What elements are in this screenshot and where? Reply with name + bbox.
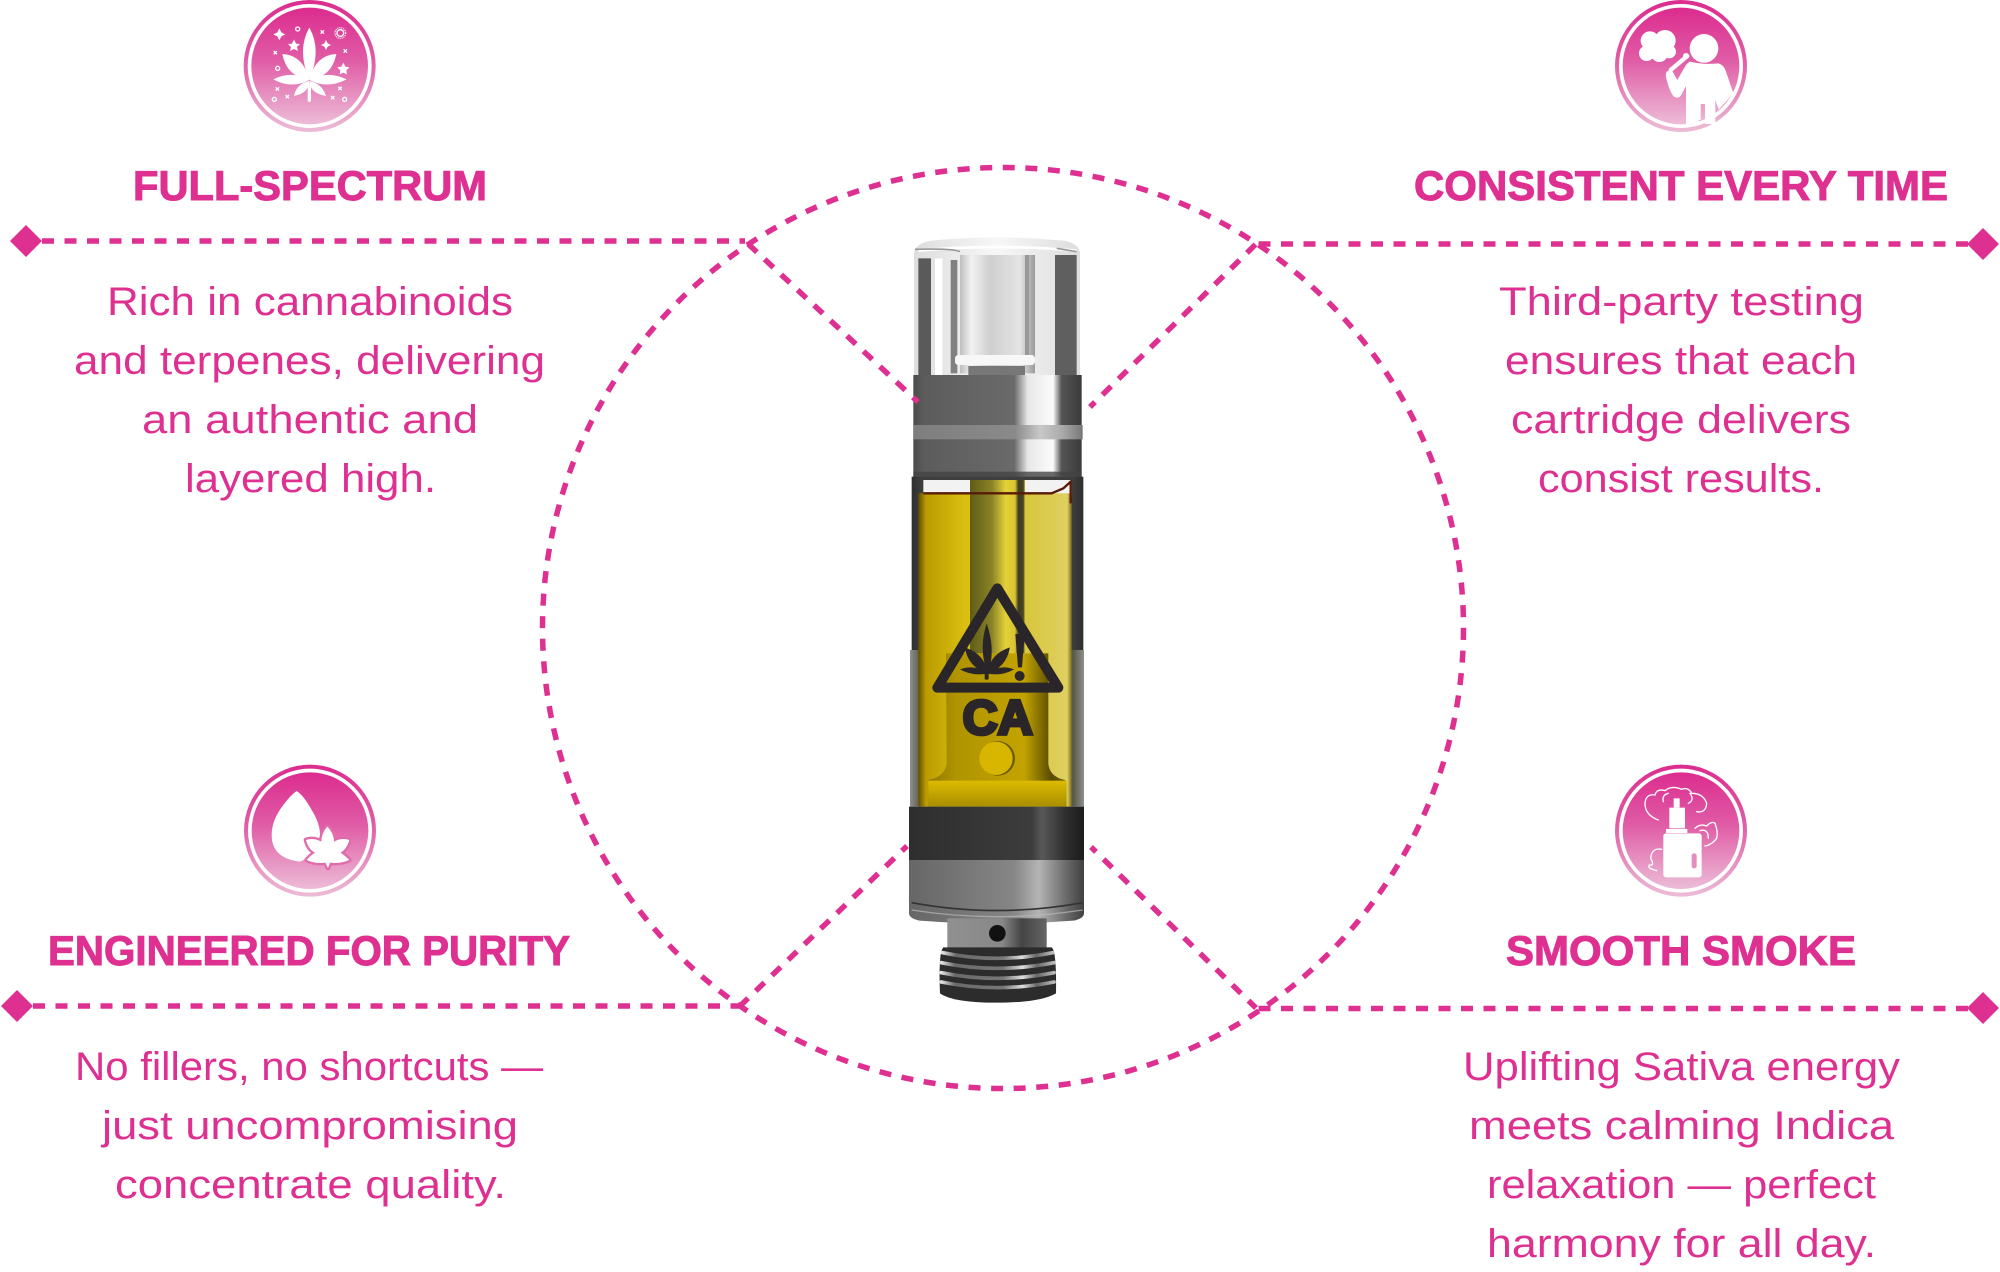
connector: consistent every time horizontal: [1256, 241, 1968, 247]
diamond marker bottom right: [1967, 992, 1999, 1024]
diamond marker top left: [10, 225, 42, 257]
warning label: triangle and CA: [937, 588, 1058, 745]
body text: Rich in cannabinoids: [107, 280, 513, 324]
connector: full-spectrum diagonal: [745, 241, 918, 402]
connector: full-spectrum horizontal: [42, 238, 745, 244]
icon: cannabis leaf with sparkles: [244, 0, 376, 132]
body text: ensures that each: [1505, 339, 1857, 383]
connector: engineered for purity horizontal: [33, 1003, 740, 1009]
CA text: CA: [963, 691, 1033, 745]
body text: consist results.: [1538, 457, 1824, 501]
heading: FULL-SPECTRUM: [133, 162, 487, 209]
body text: harmony for all day.: [1487, 1222, 1876, 1266]
cannabis leaf on label: [960, 623, 1014, 680]
oil tank: [910, 477, 1084, 807]
icon: vape device with smoke: [1615, 765, 1747, 897]
product: vape cartridge: [909, 237, 1084, 1003]
body text: just uncompromising: [101, 1104, 518, 1148]
heading: SMOOTH SMOKE: [1506, 927, 1856, 974]
diamond marker top right: [1967, 228, 1999, 260]
block: consistent every time: [1414, 0, 1948, 501]
connector: engineered for purity diagonal: [740, 846, 907, 1006]
body text: [75, 1045, 543, 1207]
block: full-spectrum: [74, 0, 545, 501]
exclamation mark: [1015, 634, 1025, 667]
body text: [1499, 280, 1864, 501]
body text: No fillers, no shortcuts —: [75, 1045, 543, 1089]
threaded connector: [940, 918, 1056, 1003]
diamond marker bottom left: [1, 990, 33, 1022]
body text: and terpenes, delivering: [74, 339, 545, 383]
heading: CONSISTENT EVERY TIME: [1414, 162, 1948, 209]
block: smooth smoke: [1463, 765, 1900, 1266]
connector: smooth smoke diagonal: [1091, 847, 1256, 1008]
body text: relaxation — perfect: [1487, 1163, 1876, 1207]
connector: consistent every time diagonal: [1090, 244, 1256, 407]
dashed circle: [542, 168, 1464, 1088]
body text: [74, 280, 545, 501]
body text: meets calming Indica: [1469, 1104, 1895, 1148]
body text: cartridge delivers: [1511, 398, 1851, 442]
icon: oil drop and leaf: [244, 765, 376, 897]
body text: Uplifting Sativa energy: [1463, 1045, 1900, 1089]
block: engineered for purity: [48, 765, 570, 1207]
body text: an authentic and: [142, 398, 478, 442]
connector: smooth smoke horizontal: [1256, 1006, 1968, 1011]
body text: [1463, 1045, 1900, 1266]
heading: ENGINEERED FOR PURITY: [48, 927, 570, 974]
body text: Third-party testing: [1499, 280, 1864, 324]
glass mouthpiece: [914, 237, 1080, 375]
metal collar: [913, 375, 1083, 478]
body text: layered high.: [185, 457, 436, 501]
base bands: [909, 807, 1084, 924]
body text: concentrate quality.: [115, 1163, 506, 1207]
icon: person exhaling vapor: [1615, 0, 1747, 132]
